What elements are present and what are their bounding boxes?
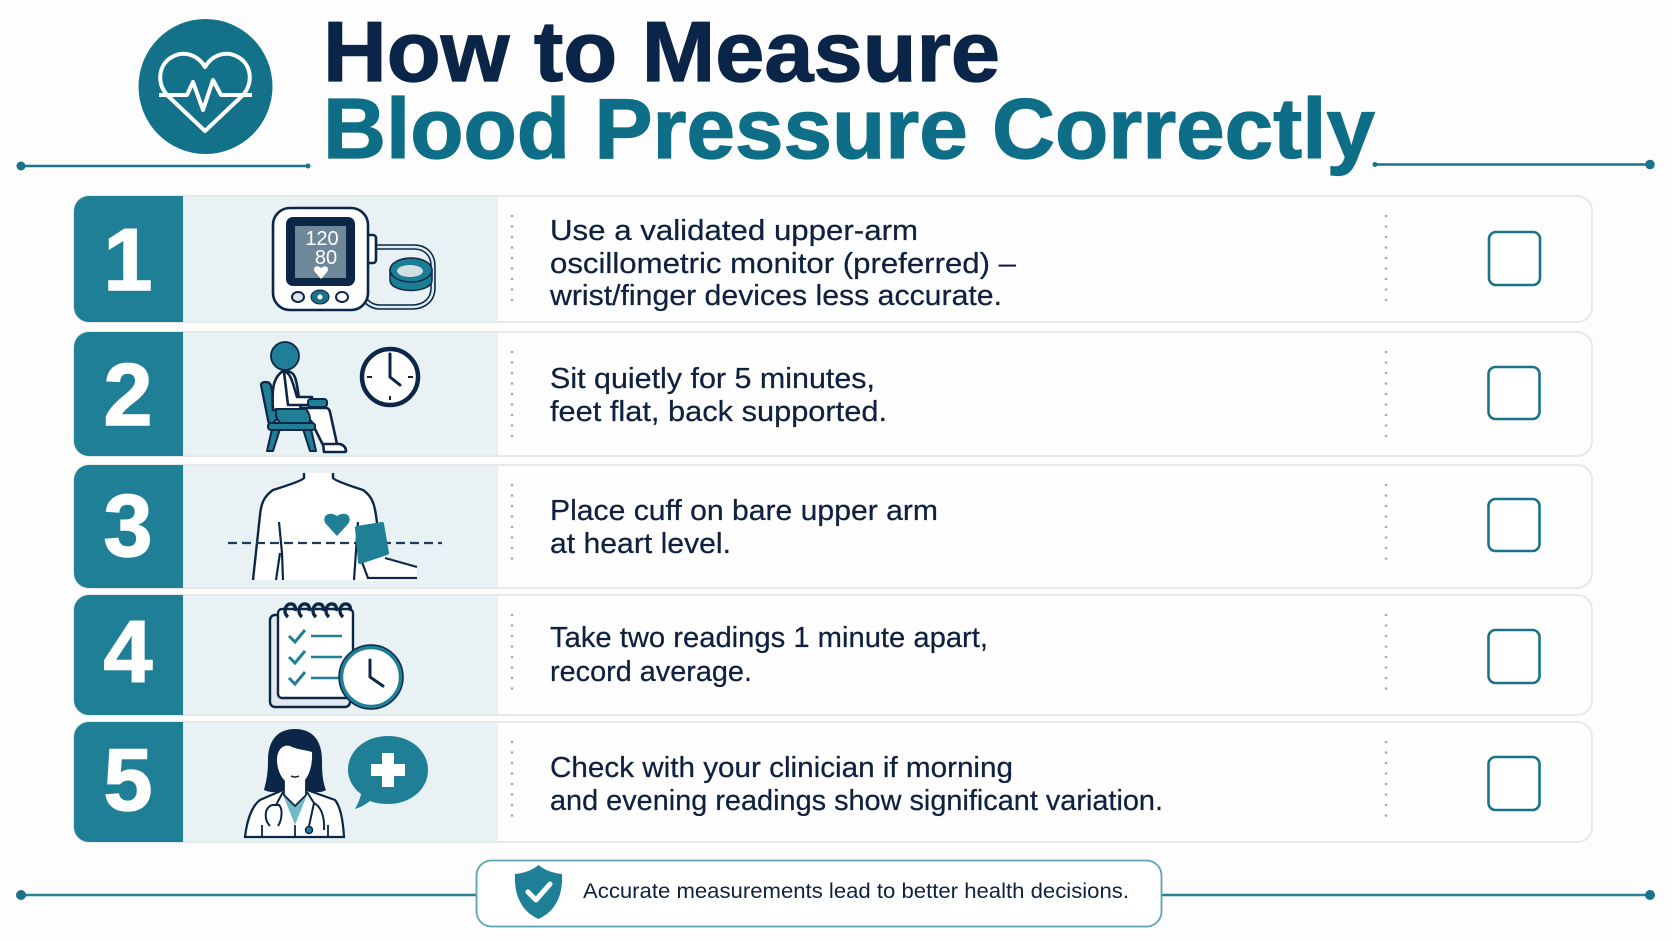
title: Blood Pressure Correctly [323, 82, 1375, 177]
card [74, 595, 1592, 715]
number badge 4: 4 [104, 602, 153, 701]
icon: torso with cuff at heart level [228, 473, 442, 581]
icon: clinician with medical speech bubble [245, 729, 428, 837]
icon: blood pressure monitor: 120 [305, 228, 339, 250]
step 4 text: record average. [550, 656, 752, 688]
icon: shield with check [515, 865, 562, 919]
number badge 2 [74, 332, 183, 456]
step 1 text: wrist/finger devices less accurate. [549, 280, 1002, 312]
step 3 text [550, 495, 938, 560]
step 5 text: and evening readings show significant variation. [550, 785, 1163, 817]
panel: step 4 [74, 595, 1592, 715]
icon: heart logo [138, 19, 272, 154]
icon: blood pressure monitor: 80 [315, 247, 337, 269]
footer rule right [1162, 890, 1655, 900]
header rule right [1372, 160, 1655, 169]
panel: step 2 [74, 332, 1592, 456]
number badge 3 [74, 465, 183, 588]
number badge 1 [74, 196, 183, 322]
checkbox 3 [1488, 499, 1540, 551]
icon: checklist and clock [270, 604, 403, 709]
checkbox 4 [1488, 630, 1540, 683]
checkbox 2 [1488, 367, 1540, 419]
step 2 text: Sit quietly for 5 minutes, [550, 363, 875, 395]
footer text: Accurate measurements lead to better health decisions. [583, 880, 1129, 903]
step 1 text: Use a validated upper-arm [550, 215, 918, 247]
icon: blood pressure monitor [273, 208, 433, 310]
step 1 text [549, 215, 1017, 312]
number badge 2: 2 [104, 345, 152, 444]
card [74, 465, 1592, 588]
step 4 text: Take two readings 1 minute apart, [550, 622, 988, 654]
callout: footer message [476, 860, 1162, 926]
step 5 text [550, 752, 1163, 817]
title [323, 5, 1375, 177]
checkbox 1 [1489, 232, 1540, 285]
header rule left [16, 162, 310, 170]
number badge 5: 5 [104, 730, 152, 829]
number badge 4 [74, 595, 183, 715]
checkbox 5 [1488, 757, 1540, 810]
step 5 text: Check with your clinician if morning [550, 752, 1013, 784]
step 2 text: feet flat, back supported. [550, 396, 887, 428]
panel: step 1 [74, 196, 1592, 322]
stethoscope [266, 792, 324, 830]
icon: seated person and clock [261, 342, 418, 452]
number badge 3: 3 [104, 476, 152, 575]
panel: step 3 [74, 465, 1592, 588]
panel: step 5 [74, 722, 1592, 842]
card [74, 332, 1592, 456]
title: How to Measure [323, 5, 1000, 100]
number badge 1: 1 [104, 210, 152, 309]
step 4 text [550, 622, 988, 688]
card [74, 722, 1592, 842]
step 3 text: at heart level. [550, 528, 731, 560]
step 1 text: oscillometric monitor (preferred) – [550, 248, 1017, 280]
card [74, 196, 1592, 322]
step 2 text [550, 363, 887, 428]
number badge 5 [74, 722, 183, 842]
footer rule left [16, 890, 477, 900]
step 3 text: Place cuff on bare upper arm [550, 495, 938, 527]
